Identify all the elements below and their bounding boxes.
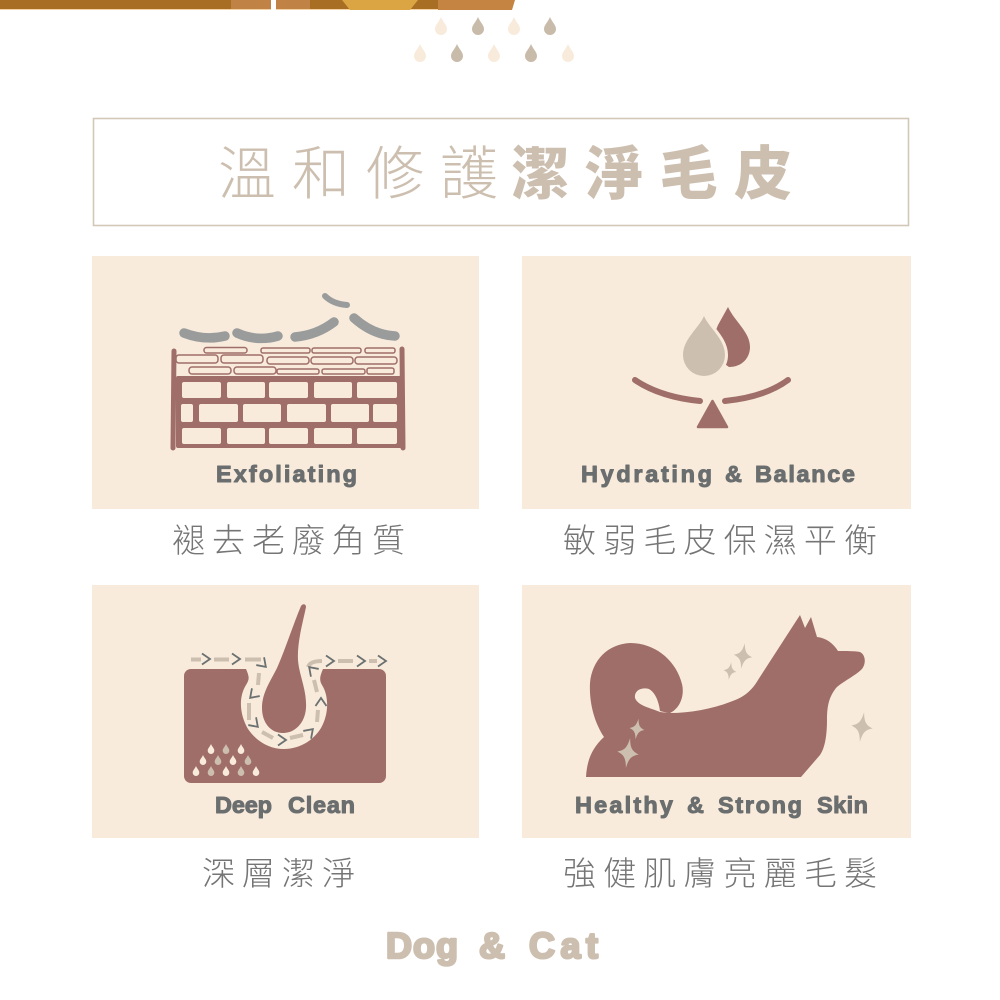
footer: Dog & Cat (386, 925, 598, 966)
icon: hair follicle (184, 604, 386, 783)
title box: 潔淨毛皮 (511, 142, 792, 207)
icon: dog silhouette with sparkles (586, 615, 875, 777)
label: Hydrating (581, 461, 712, 487)
label: Exfoliating (216, 461, 357, 487)
label (581, 461, 855, 487)
label: & (725, 461, 742, 487)
label: Deep (215, 792, 272, 818)
flow dashes (191, 660, 377, 738)
label (575, 792, 868, 818)
label: Strong (718, 792, 802, 818)
panel: hydrating (522, 256, 911, 509)
caption: exfoliating: 褪去老廢角質 (172, 522, 405, 559)
label: Healthy (575, 792, 673, 818)
icon: skin brick wall (173, 296, 403, 448)
title box (94, 118, 908, 226)
footer: Dog & Cat: Cat (529, 925, 598, 966)
decorative water drops (414, 17, 574, 62)
icon: drops on balance (635, 307, 788, 427)
footer: Dog & Cat: Dog (386, 925, 458, 966)
label: Clean (288, 792, 355, 818)
sparkles (615, 642, 875, 769)
label: & (687, 792, 704, 818)
panel: exfoliating (92, 256, 479, 509)
panel: deep clean (92, 585, 479, 838)
small drops in skin (193, 744, 259, 776)
label (215, 792, 355, 818)
caption: hydrating: 敏弱毛皮保濕平衡 (563, 522, 877, 559)
top banner (0, 0, 515, 10)
flow arrows (202, 654, 386, 746)
title box: 溫和修護 (218, 142, 498, 207)
caption: deep clean: 深層潔淨 (202, 855, 355, 892)
label: Balance (755, 461, 855, 487)
label: Skin (817, 792, 868, 818)
panel: healthy skin (522, 585, 911, 838)
footer: Dog & Cat: & (479, 925, 505, 966)
flaking grey skin cells (184, 296, 395, 338)
caption: healthy skin: 強健肌膚亮麗毛髮 (563, 855, 877, 892)
